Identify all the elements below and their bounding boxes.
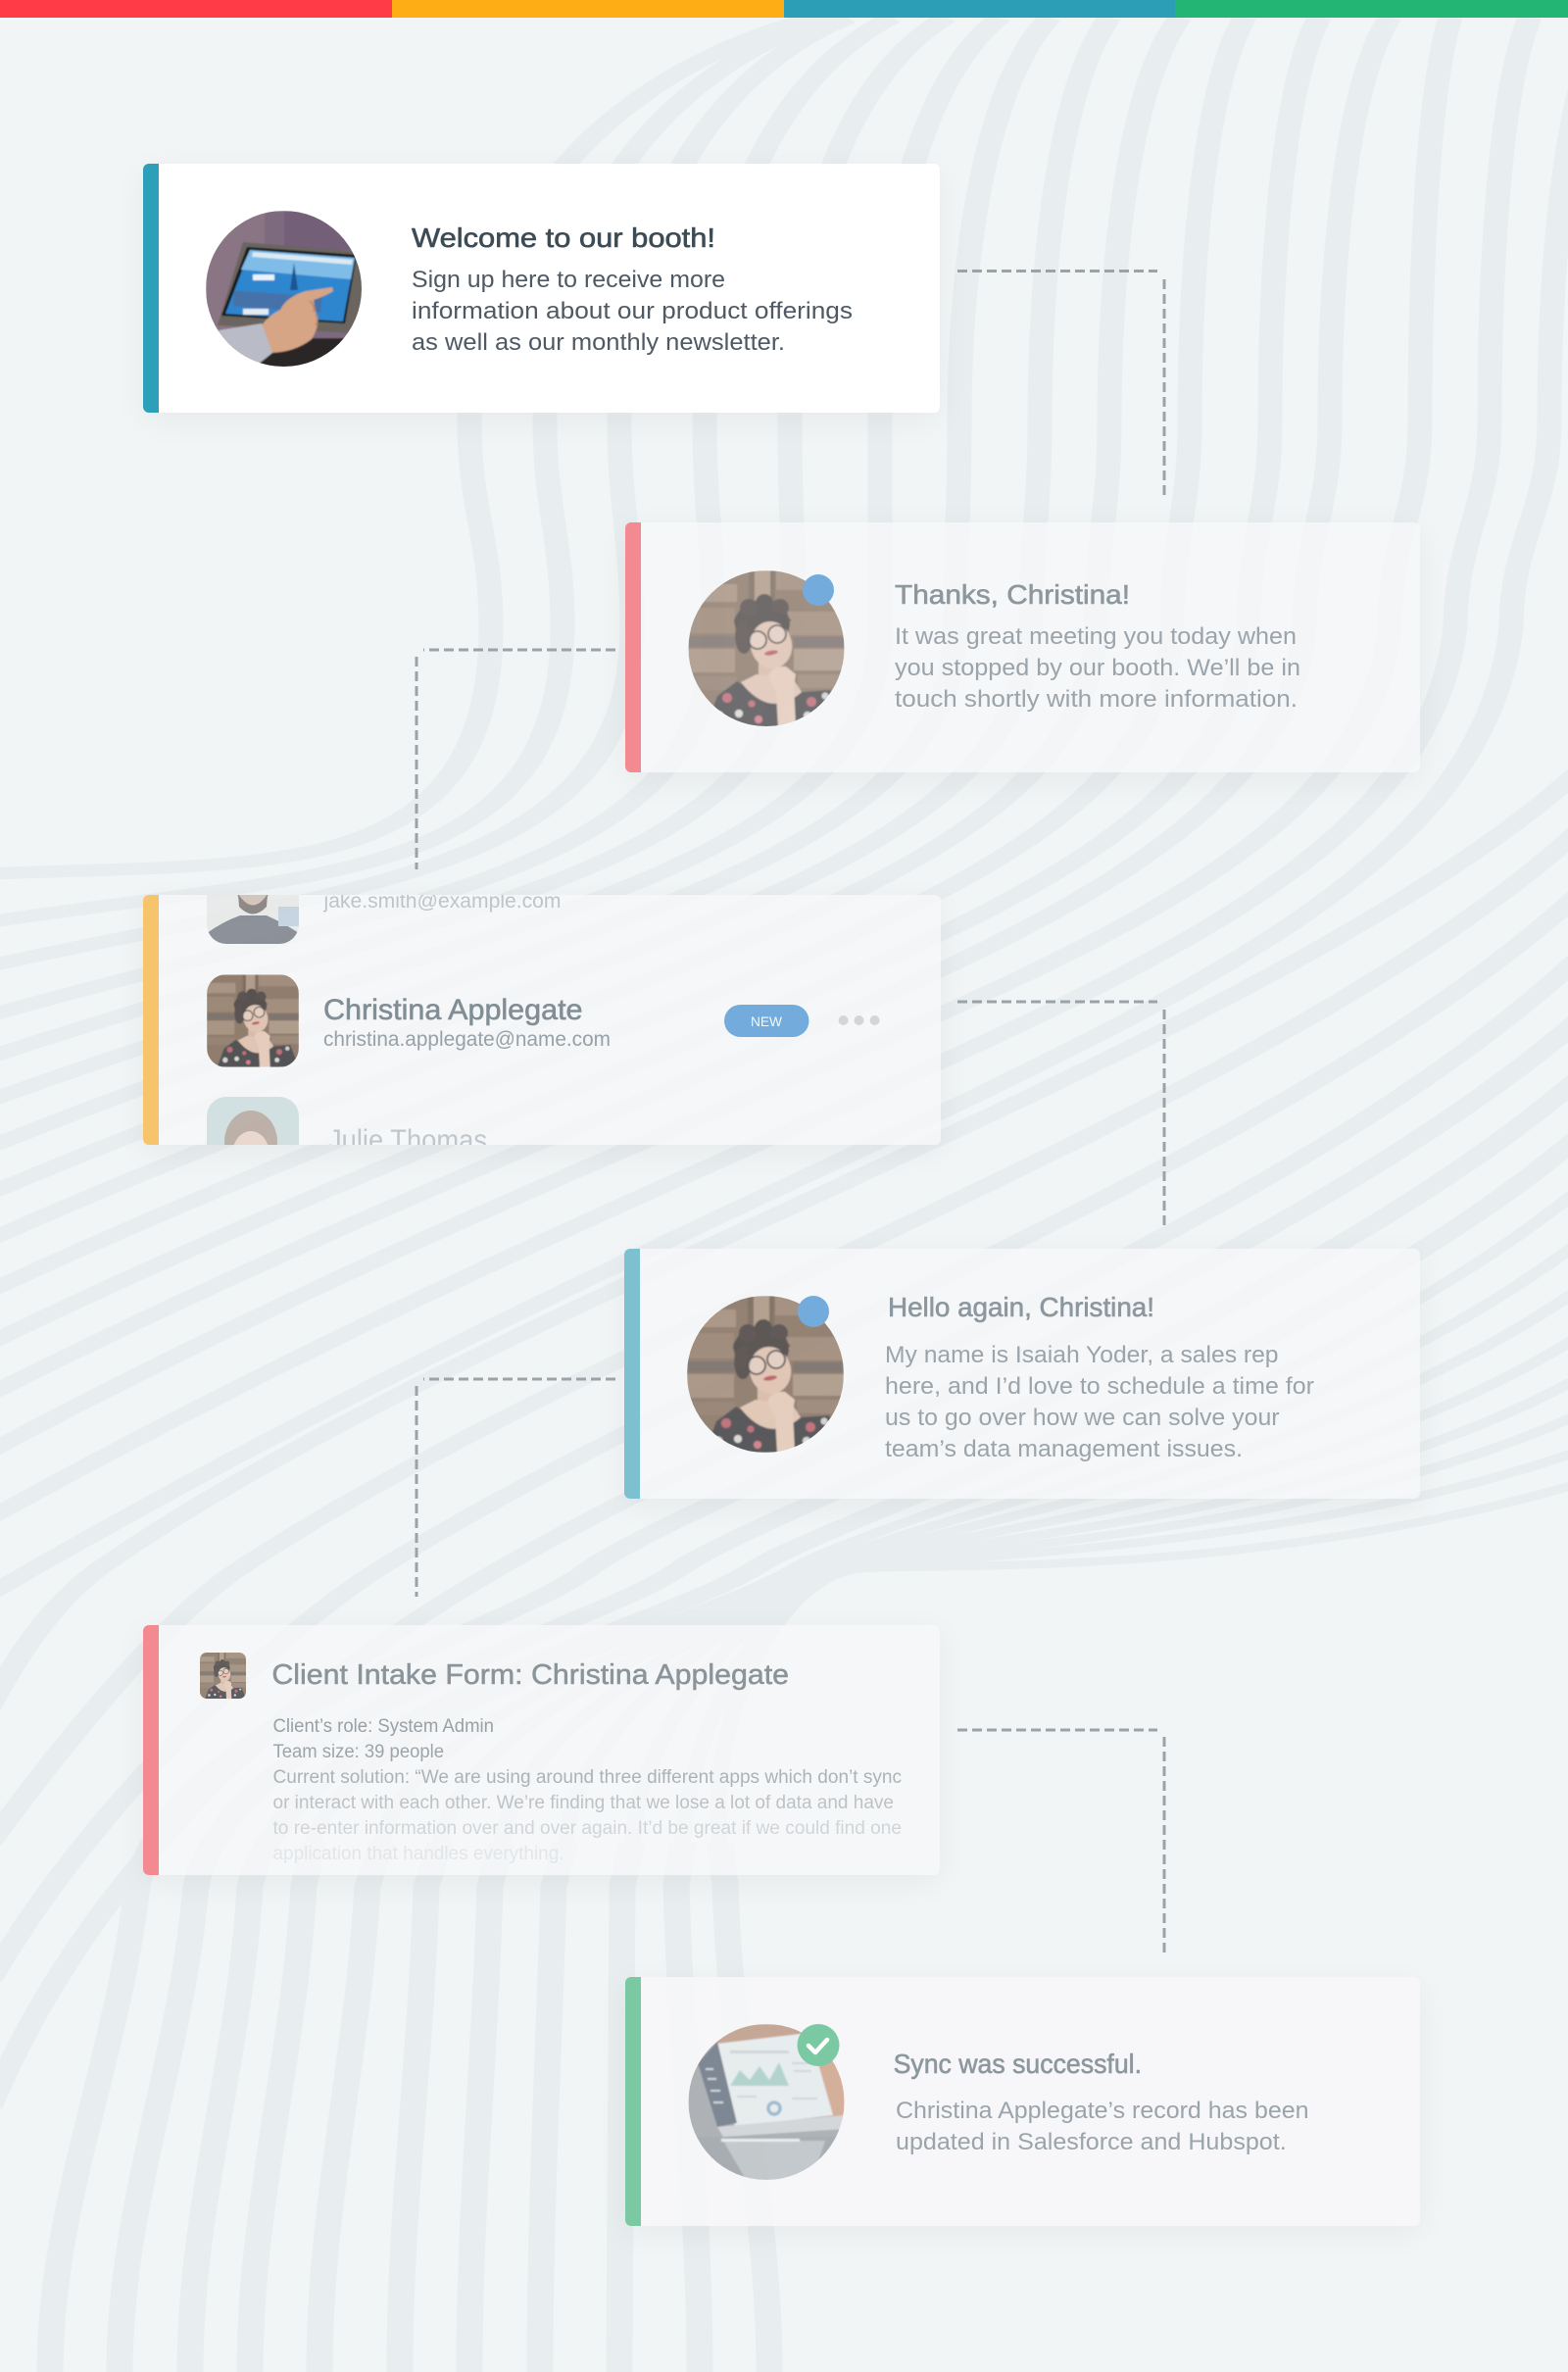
- form details: [272, 1716, 902, 1864]
- avatar: christina thumbnail: [200, 1653, 246, 1699]
- name: julie: Julie Thomas: [328, 1124, 487, 1157]
- avatar: jake: [207, 895, 299, 944]
- panel: client intake form: [143, 1625, 940, 1875]
- form details: Team size: 39 people: [272, 1742, 444, 1762]
- icon: success check: [798, 2024, 839, 2066]
- status dot: [803, 574, 834, 606]
- photo: christina: [687, 1296, 844, 1453]
- icon: more dots: [839, 1015, 880, 1025]
- panel: thanks christina: [625, 522, 1420, 772]
- body text: updated in Salesforce and Hubspot.: [896, 2129, 1287, 2155]
- panel: welcome to our booth: [143, 164, 940, 413]
- email: christina: christina.applegate@name.com: [323, 1028, 611, 1051]
- arrow: connector hello again to intake form: [416, 1379, 615, 1597]
- email: jake: jake.smith@example.com: [322, 890, 561, 913]
- body text: [885, 1342, 1314, 1462]
- heading: Sync was successful.: [894, 2049, 1142, 2079]
- body text: [896, 2098, 1309, 2155]
- body text: It was great meeting you today when: [895, 623, 1297, 650]
- arrow: connector intake form to sync: [957, 1730, 1164, 1955]
- form details: application that handles everything.: [272, 1844, 564, 1864]
- body text: [895, 623, 1300, 713]
- heading: Client Intake Form: Christina Applegate: [271, 1659, 789, 1691]
- badge: new: NEW: [751, 1013, 783, 1029]
- form details: Current solution: “We are using around three different apps which don’t sync: [272, 1767, 902, 1788]
- avatar: christina: [207, 974, 299, 1066]
- name: christina: Christina Applegate: [323, 994, 582, 1026]
- heading: Welcome to our booth!: [412, 222, 715, 253]
- panel: contact list: [143, 895, 941, 1145]
- panel: hello again: [624, 1249, 1420, 1499]
- body text: Sign up here to receive more: [412, 267, 725, 293]
- heading: Thanks, Christina!: [895, 579, 1130, 610]
- body text: team’s data management issues.: [885, 1436, 1243, 1462]
- body text: you stopped by our booth. We’ll be in: [895, 655, 1300, 681]
- form details: to re-enter information over and over again. It’d be great if we could find one: [272, 1818, 902, 1839]
- panel: sync successful: [625, 1977, 1307, 2226]
- arrow: connector contact list to hello again: [957, 1002, 1164, 1227]
- form details: Client’s role: System Admin: [272, 1716, 494, 1737]
- avatar: julie: [207, 1097, 299, 1145]
- photo: hand on tablet: [206, 211, 365, 370]
- body text: information about our product offerings: [412, 298, 853, 324]
- status dot: [798, 1296, 829, 1327]
- body text: us to go over how we can solve your: [885, 1405, 1280, 1431]
- badge: new: [724, 1005, 809, 1037]
- body text: My name is Isaiah Yoder, a sales rep: [885, 1342, 1278, 1368]
- body text: [412, 267, 853, 356]
- form details: or interact with each other. We’re finding that we lose a lot of data and have: [272, 1793, 894, 1813]
- body text: here, and I’d love to schedule a time for: [885, 1373, 1314, 1400]
- photo: laptop dashboard: [688, 2024, 845, 2181]
- heading: Hello again, Christina!: [888, 1292, 1154, 1322]
- photo: christina: [688, 570, 845, 727]
- body text: touch shortly with more information.: [895, 686, 1298, 713]
- top colour bar: [0, 0, 1568, 18]
- body text: Christina Applegate’s record has been: [896, 2098, 1309, 2124]
- arrow: connector welcome to thanks: [957, 271, 1164, 496]
- arrow: connector thanks to contact list: [416, 650, 615, 869]
- body text: as well as our monthly newsletter.: [412, 329, 785, 356]
